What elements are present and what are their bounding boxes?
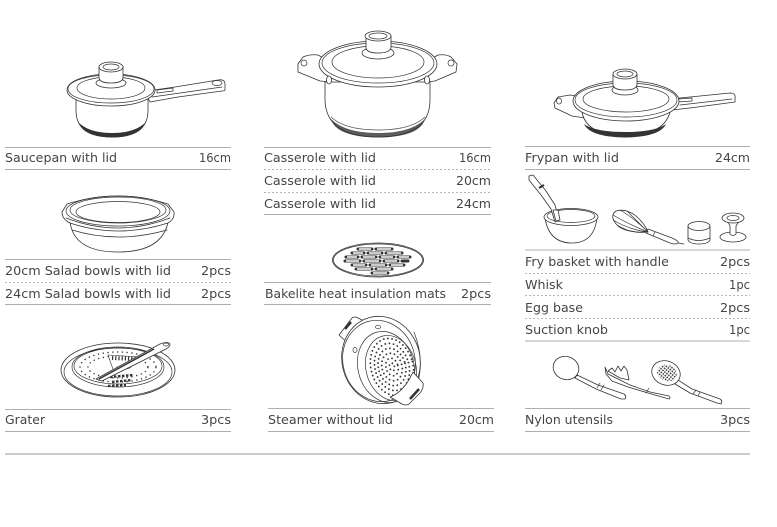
row: steamer <box>268 408 494 432</box>
row: grater: Grater <box>5 412 46 427</box>
row: salad bowls: 2pcs <box>201 263 231 278</box>
row: accessories list: Fry basket with handle <box>525 254 669 269</box>
icon: saucepan with lid <box>67 62 225 138</box>
row: frypan: Frypan with lid <box>525 150 619 165</box>
row: saucepan: 16cm <box>199 150 231 165</box>
row: accessories list <box>525 250 750 341</box>
row: bakelite mats: 2pcs <box>461 286 491 301</box>
row: saucepan: Saucepan with lid <box>5 150 117 165</box>
row: steamer: 20cm <box>459 412 494 427</box>
row: casseroles: 20cm <box>456 173 491 188</box>
row: saucepan <box>5 148 231 170</box>
row: casseroles: Casserole with lid <box>264 173 376 188</box>
row: bakelite mats <box>264 282 491 304</box>
row: salad bowls: 20cm Salad bowls with lid <box>5 263 171 278</box>
icon: frypan with lid <box>554 69 735 138</box>
bottom divider <box>5 453 750 455</box>
row: frypan <box>525 146 750 170</box>
row: accessories list: 1pc <box>729 277 750 292</box>
icon: bakelite heat insulation mat <box>332 243 424 277</box>
row: grater <box>5 410 231 432</box>
icon: suction knob <box>720 213 746 242</box>
icon: casserole with lid <box>298 31 457 138</box>
icon: whisk <box>613 210 684 244</box>
row: accessories list: 2pcs <box>720 300 750 315</box>
icon: nylon pasta server <box>605 366 670 399</box>
row: casseroles: Casserole with lid <box>264 150 376 165</box>
row: accessories list: Suction knob <box>525 322 608 337</box>
row: bakelite mats: Bakelite heat insulation mats <box>265 286 446 301</box>
row: nylon utensils: 3pcs <box>720 412 750 427</box>
row: steamer: Steamer without lid <box>268 412 393 427</box>
icon: nylon skimmer <box>648 357 722 404</box>
row: accessories list: 2pcs <box>720 254 750 269</box>
row: casseroles: 24cm <box>456 196 491 211</box>
icon: salad bowl with lid <box>62 196 174 252</box>
row: casseroles <box>264 148 491 214</box>
row: nylon utensils: Nylon utensils <box>525 412 613 427</box>
row: accessories list: 1pc <box>729 322 750 337</box>
row: salad bowls: 2pcs <box>201 286 231 301</box>
icon: egg base <box>688 222 710 244</box>
icon: grater <box>61 342 175 397</box>
icon: steamer without lid <box>332 307 430 413</box>
icon: fry basket with handle <box>529 175 598 243</box>
row: accessories list: Whisk <box>525 277 564 292</box>
icon: nylon ladle <box>550 353 626 399</box>
row: casseroles: 16cm <box>459 150 491 165</box>
row: frypan: 24cm <box>715 150 750 165</box>
row: nylon utensils <box>525 408 750 432</box>
row: casseroles: Casserole with lid <box>264 196 376 211</box>
row: grater: 3pcs <box>201 412 231 427</box>
row: salad bowls <box>5 260 231 304</box>
row: accessories list: Egg base <box>525 300 583 315</box>
row: salad bowls: 24cm Salad bowls with lid <box>5 286 171 301</box>
